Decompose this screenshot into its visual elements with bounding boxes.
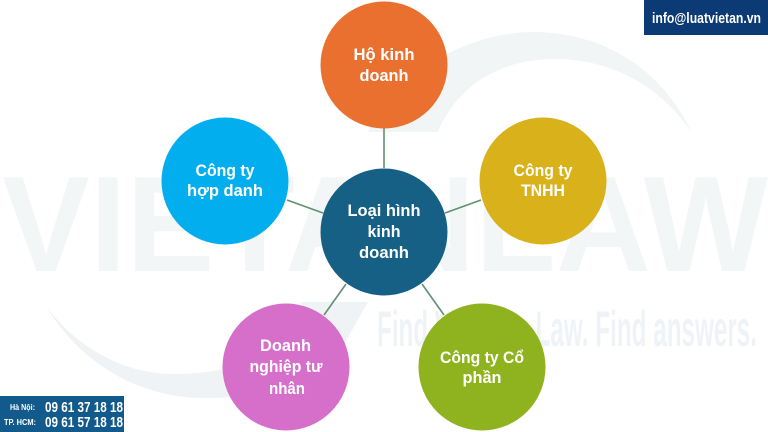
phone badge <box>0 396 124 432</box>
watermark: triangle mark <box>300 302 368 346</box>
watermark: lower arc <box>46 306 250 398</box>
phone: Hà Nội: 09 61 37 18 18 <box>45 399 123 416</box>
center node: Loại hình kinh doanh: Loại hình <box>348 201 420 220</box>
email badge <box>644 0 768 35</box>
node: Công ty TNHH: Công ty <box>514 161 573 180</box>
node: Công ty TNHH: TNHH <box>521 181 565 200</box>
phone: TP. HCM <box>4 414 123 431</box>
node: Doanh nghiệp tư nhân <box>222 304 350 430</box>
node: Công ty hợp danh <box>162 118 288 244</box>
node: Công ty hợp danh: hợp danh <box>187 181 263 200</box>
node: Công ty hợp danh: Công ty <box>196 161 255 180</box>
node: Hộ kinh doanh: Hộ kinh <box>354 45 414 64</box>
node: Doanh nghiệp tư nhân: Doanh <box>260 336 311 355</box>
node: Hộ kinh doanh: doanh <box>360 66 408 85</box>
phone: TP. HCM: 09 61 57 18 18 <box>45 414 123 431</box>
node: Doanh nghiệp tư nhân: nhân <box>269 379 305 398</box>
phone: Hà Nội: Hà Nội: <box>10 403 35 412</box>
center node: Loại hình kinh doanh: kinh <box>368 222 400 241</box>
watermark: upper arc <box>368 32 692 133</box>
node: Doanh nghiệp tư nhân: nghiệp tư <box>250 357 323 376</box>
node: Công ty TNHH <box>480 118 606 244</box>
node: Công ty Cổ phần: Công ty Cổ <box>440 348 524 367</box>
node: Công ty Cổ phần <box>418 304 546 430</box>
center node: Loại hình kinh doanh <box>320 168 448 296</box>
phone: Hà Nội <box>10 399 123 416</box>
center node: Loại hình kinh doanh: doanh <box>359 243 409 262</box>
phone: TP. HCM: TP. HCM: <box>4 418 36 427</box>
node: Công ty Cổ phần: phần <box>462 368 502 387</box>
node: Hộ kinh doanh <box>320 2 448 128</box>
connector lines <box>287 128 481 315</box>
